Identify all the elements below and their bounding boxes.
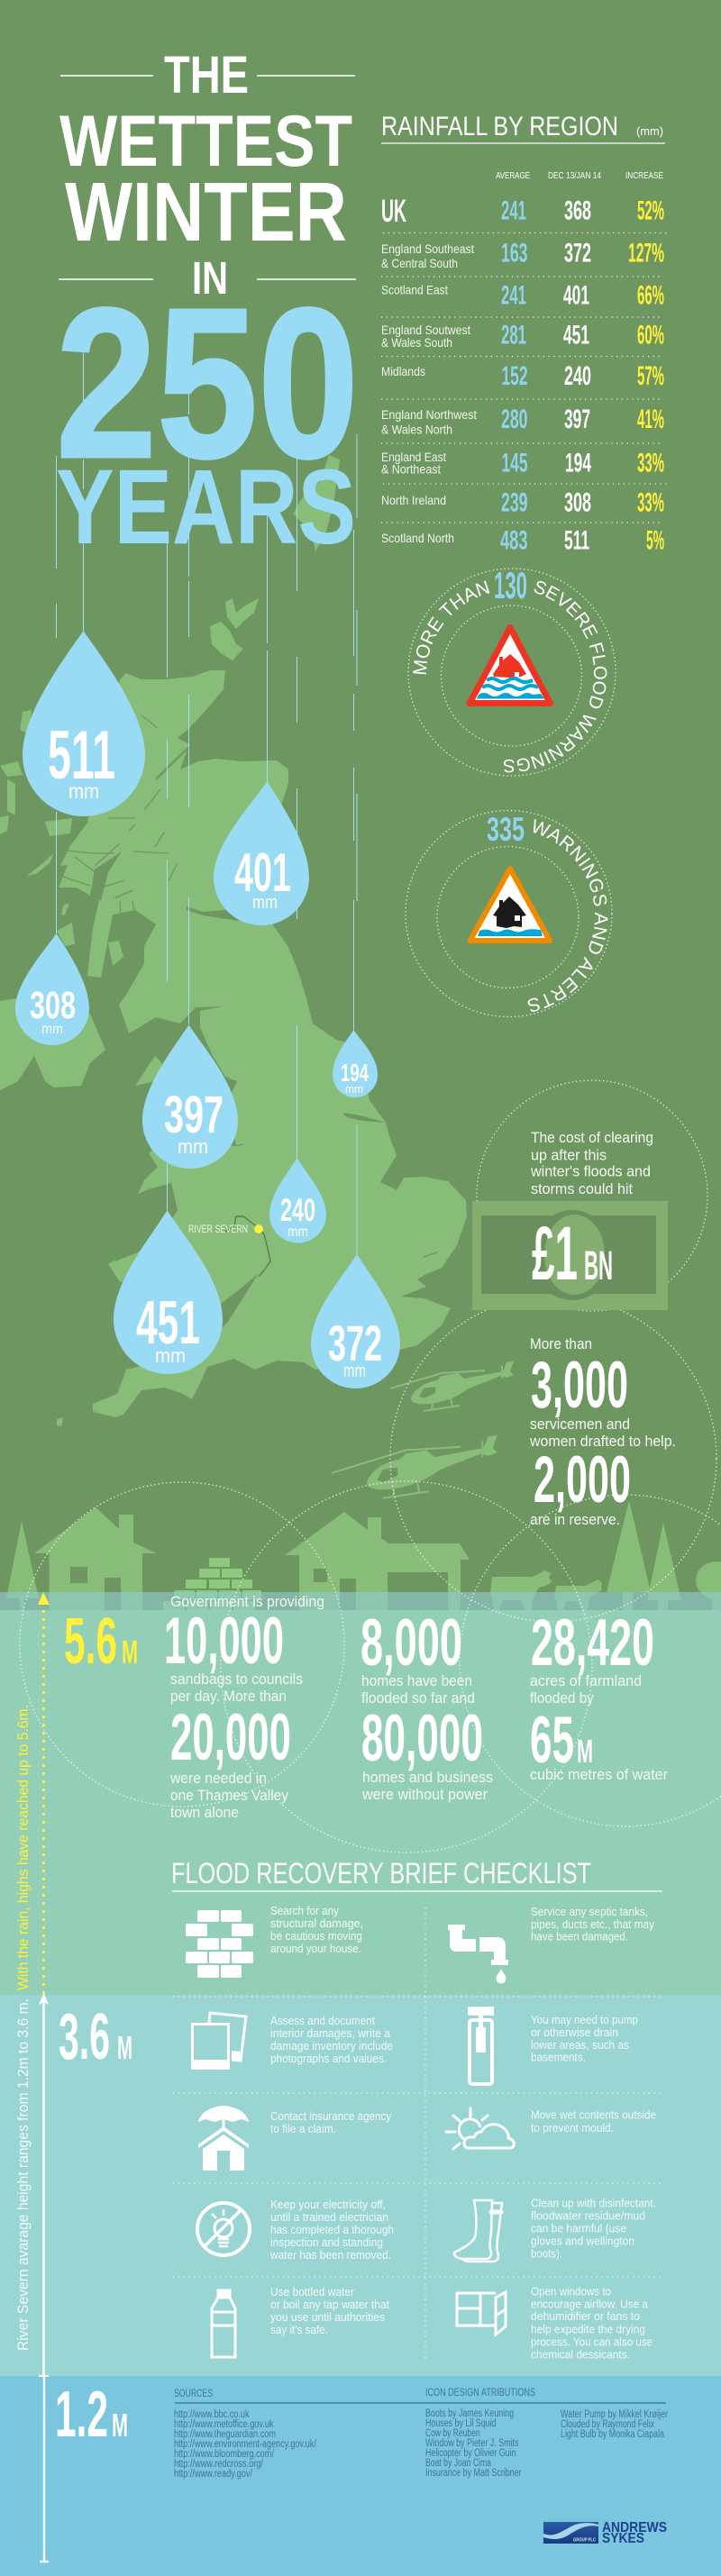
row: England Southwest: & Wales South: [381, 335, 452, 350]
checklist: disinfect: can be harmful (use: [531, 2222, 626, 2235]
drop: 397 mm: [142, 1025, 238, 1169]
icon: banknote: [472, 1201, 668, 1310]
map of the UK: [0, 455, 467, 1426]
icon: wellington boots: [454, 2200, 502, 2262]
checklist: mould: [446, 2108, 656, 2149]
drop: 451 mm: [114, 1210, 223, 1374]
stat: farmland flooded: cubic metres of water: [530, 1766, 668, 1783]
checklist: pump: basements.: [531, 2051, 586, 2063]
row: England Northwest: [381, 405, 664, 436]
title: WINTER: [65, 165, 347, 259]
stat: homes flooded: flooded so far and: [361, 1689, 475, 1707]
title: WETTEST: [59, 101, 352, 182]
row: North Ireland: North Ireland: [381, 493, 446, 507]
row: England Southwest: England Soutwest: [381, 323, 470, 337]
checklist: pump: You may need to pump: [531, 2013, 638, 2026]
drop: 397 mm: 397: [164, 1086, 224, 1144]
row: England Southeast: 372: [564, 238, 591, 269]
stat: sandbags: Government is providing: [170, 1593, 324, 1610]
title: THE: [164, 46, 249, 105]
height marker: 1.2m: 1.2: [55, 2379, 108, 2451]
checklist: pump: or otherwise drain: [531, 2025, 618, 2039]
icon: water pump: [468, 2007, 494, 2084]
height marker: 3.6m: [14, 1993, 132, 2376]
drop: 451 mm: mm: [155, 1344, 186, 1367]
banknote cost panel: £1: [532, 1211, 578, 1296]
row: England Northwest: 397: [564, 405, 590, 434]
checklist heading: FLOOD RECOVERY BRIEF CHECKLIST: [171, 1857, 591, 1889]
tree: small: [647, 1523, 681, 1610]
helicopter: lower: [332, 1435, 497, 1498]
callout: 130 severe flood warnings: MORE THAN: [413, 580, 490, 674]
row: England Northwest: & Wales North: [381, 422, 452, 436]
checklist: electricity: Keep your electricity off,: [270, 2198, 386, 2211]
icon design attributions: Houses by Lil Squid: [425, 2418, 496, 2429]
drop: 372 mm: 372: [328, 1315, 382, 1371]
row: England Southeast: 127%: [628, 238, 664, 269]
stat: servicemen drafted: servicemen and: [530, 1415, 630, 1433]
checklist: bottled water: say it's safe.: [270, 2323, 328, 2336]
checklist: insurance: to file a claim.: [270, 2122, 336, 2135]
sources: http://www.redcross.org/: [174, 2459, 264, 2470]
row: England East: [381, 449, 664, 478]
height marker: 1.2m: M: [112, 2407, 128, 2444]
row: Midlands: [381, 361, 664, 391]
drop: 397 mm: mm: [178, 1135, 208, 1158]
stat: homes flooded: 80,000: [361, 1702, 483, 1775]
stat: servicemen drafted: 2,000: [534, 1443, 631, 1516]
drop: 401 mm: [214, 781, 309, 925]
stat: farmland flooded: [530, 1607, 668, 1783]
icon: sun and cloud: [446, 2108, 514, 2149]
checklist: windows: help expedite the drying: [531, 2322, 645, 2335]
checklist: bottled water: you use until authorities: [270, 2310, 385, 2324]
callout: 130 severe flood warnings: 130: [494, 564, 527, 606]
row: Scotland East: 401: [563, 281, 589, 310]
drop: 308 mm: mm: [41, 1022, 63, 1037]
drop: 401 mm: 401: [234, 842, 291, 903]
stat: sandbags: sandbags to councils: [170, 1670, 303, 1688]
checklist: bottled water: Use bottled water: [270, 2285, 355, 2298]
checklist: interior damage: interior damages, write a: [270, 2026, 391, 2040]
checklist: electricity: until a trained electrician: [270, 2210, 388, 2224]
icon design attributions: Light Bulb by Monika Ciapala: [561, 2429, 664, 2440]
map: islands: [0, 455, 340, 1426]
sources: http://www.bbc.co.uk: [174, 2409, 250, 2420]
icon design attributions: Window by Pieter J. Smits: [425, 2438, 519, 2449]
row: UK: UK: [381, 194, 406, 229]
house: with garage: [285, 1512, 470, 1610]
drop: 372 mm: [311, 1254, 400, 1388]
dotted circles: [20, 1080, 721, 1852]
stat: sandbags: one Thames Valley: [170, 1787, 288, 1804]
stat: servicemen drafted: 3,000: [531, 1349, 628, 1422]
text: cost of clearing up: The cost of clearing: [531, 1129, 653, 1146]
stat: homes flooded: homes and business: [362, 1769, 493, 1786]
callout: 335 warnings and alerts: 335: [487, 811, 525, 848]
stat: servicemen drafted: are in reserve.: [530, 1511, 620, 1528]
drop: 372 mm: mm: [343, 1361, 366, 1381]
rain drops: [15, 631, 400, 1388]
checklist: interior damage: photographs and values.: [270, 2052, 387, 2065]
icon design attributions: [425, 2388, 668, 2479]
icon: flood warning triangle: [470, 869, 550, 941]
stat: sandbags: [164, 1593, 324, 1821]
icon design attributions: Insurance by Matt Scribner: [425, 2468, 522, 2479]
stat: farmland flooded: acres of farmland: [530, 1672, 642, 1689]
icon: house under umbrella: [198, 2106, 249, 2171]
checklist: structural damage: be cautious moving: [270, 1929, 362, 1943]
helicopter: upper: [390, 1361, 514, 1411]
row: England Southwest: 451: [563, 321, 589, 350]
icon: crossed out light bulb: [197, 2203, 250, 2255]
stat: servicemen drafted: More than: [530, 1335, 592, 1352]
checklist: windows: [457, 2285, 653, 2361]
row: England Southeast: & Central South: [381, 256, 458, 270]
row: England Southeast: 163: [501, 238, 528, 269]
rainfall table: 66%: [637, 281, 664, 310]
rainfall table: 33%: [637, 488, 664, 517]
checklist: bottled water: [212, 2285, 389, 2357]
row: England East: 145: [501, 449, 528, 478]
stat: sandbags: 20,000: [170, 1701, 291, 1774]
stat: homes flooded: 8,000: [360, 1607, 462, 1679]
height marker: 5.6m: With the rain, highs have reached up to 5.6m.: [14, 1705, 32, 1990]
checklist: interior damage: Assess and document: [270, 2014, 375, 2027]
checklist: interior damage: damage inventory include: [270, 2039, 393, 2053]
icon: severe flood warning triangle: [470, 627, 550, 703]
checklist: insurance: Contact insurance agency: [270, 2109, 391, 2123]
sandbags pile: [163, 1558, 261, 1610]
checklist: disinfect: gloves and wellington: [531, 2235, 634, 2248]
row: Scotland North: [381, 526, 664, 555]
checklist: windows: encourage airflow. Use a: [531, 2298, 649, 2311]
row: Scotland North: 483: [500, 526, 528, 555]
icon design attributions: Clouded by Raymond Felix: [561, 2419, 654, 2430]
row: England East: England East: [381, 450, 446, 464]
checklist: electricity: has completed a thorough: [270, 2223, 394, 2236]
banknote cost panel: [472, 1129, 668, 1310]
title: IN: [192, 252, 228, 304]
row: Midlands: 240: [564, 361, 591, 391]
stat: farmland flooded: 65: [530, 1704, 574, 1777]
checklist: electricity: water has been removed.: [269, 2248, 391, 2262]
drop: 240 mm: [269, 1158, 326, 1243]
row: Scotland East: 241: [501, 281, 526, 310]
rainfall table: 52%: [637, 196, 664, 225]
logo: Andrews Sykes: ANDREWS: [602, 2520, 667, 2535]
height marker: 5.6m: [14, 1592, 138, 1995]
stat: sandbags: town alone: [170, 1804, 239, 1821]
table heading: RAINFALL BY REGION: [381, 112, 618, 141]
map: River Severn: [225, 1216, 270, 1277]
title: [56, 46, 359, 567]
sources: http://www.environment-agency.gov.uk/: [174, 2439, 317, 2450]
row: England Northwest: England Northwest: [381, 407, 477, 422]
row: England Northwest: 280: [501, 405, 528, 434]
checklist: windows: process. You can also use: [531, 2335, 653, 2348]
text: cost of clearing up: storms could hit: [531, 1180, 633, 1197]
drop: 194 mm: mm: [345, 1082, 363, 1096]
row: England East: & Northeast: [381, 461, 441, 476]
text: cost of clearing up: [530, 1129, 653, 1197]
checklist: disinfect: [454, 2197, 656, 2262]
stat: farmland flooded: M: [577, 1733, 593, 1770]
checklist: windows: chemical dessicants.: [531, 2348, 630, 2361]
arrow: white height range: [39, 1993, 49, 2376]
text: cost of clearing up: up after this: [531, 1146, 607, 1164]
height marker: 5.6m: M: [122, 1634, 138, 1670]
height marker: 3.6m: 3.6: [59, 2001, 110, 2073]
callout: 335 warnings and alerts: WARNINGS AND ALERTS: [528, 819, 607, 1012]
checklist: mould: to prevent mould.: [531, 2121, 614, 2135]
checklist: disinfect: boots).: [531, 2246, 562, 2260]
stat: sandbags: per day. More than: [170, 1688, 287, 1705]
checklist: structural damage: [186, 1904, 363, 1978]
icon design attributions: Water Pump by Mikkel Krøijer: [561, 2409, 668, 2420]
row: Midlands: Midlands: [381, 364, 425, 378]
stat: homes flooded: homes have been: [361, 1672, 472, 1689]
rainfall table: 33%: [637, 449, 664, 478]
height marker: 1.2m: [40, 2376, 128, 2562]
table heading: (mm): [636, 124, 663, 138]
tree: tall: [607, 1500, 651, 1610]
row: England Southeast: [381, 238, 664, 270]
column headers: DEC 13/JAN 14: [548, 170, 601, 181]
row: UK: [381, 194, 664, 229]
row: Scotland North: 511: [564, 526, 589, 555]
checklist: windows: dehumidifier or fans to: [531, 2309, 640, 2323]
column headers: AVERAGE: [496, 170, 530, 181]
callout: 130 severe flood warnings: SEVERE FLOOD WARNINGS: [503, 580, 607, 773]
stat: servicemen drafted: women drafted to help.: [529, 1433, 676, 1450]
rainfall table: 60%: [637, 321, 664, 350]
drop: 401 mm: mm: [252, 893, 278, 913]
icon: pipes and drip: [448, 1925, 508, 1984]
drop: 240 mm: mm: [287, 1224, 308, 1240]
icon: open window: [457, 2292, 506, 2335]
icon design attributions: Boots by James Keuning: [425, 2408, 514, 2419]
sources: SOURCES: [174, 2389, 213, 2399]
row: North Ireland: 308: [564, 488, 591, 517]
icon: bricks: [186, 1910, 253, 1978]
row: England East: 194: [565, 449, 591, 478]
stat: servicemen drafted: [529, 1335, 676, 1528]
rainfall table: 41%: [637, 405, 664, 434]
logo: Andrews Sykes: [543, 2520, 667, 2546]
scene: houses, trees, cows and sandbags: [6, 1361, 721, 1610]
label: River Severn: RIVER SEVERN: [188, 1224, 248, 1235]
drop: 451 mm: 451: [136, 1288, 200, 1357]
row: UK: 368: [564, 196, 591, 225]
checklist: disinfect: Clean up with disinfectant.: [531, 2197, 656, 2210]
tree: left: [6, 1521, 39, 1610]
row: North Ireland: 239: [501, 488, 528, 517]
height marker: 3.6m: River Severn avarage height ranges from 1.2m to 3.6 m.: [14, 1998, 32, 2351]
arrow: yellow dotted: [38, 1592, 50, 1995]
map: sea lochs and firths: [90, 851, 386, 1123]
checklist: septic tanks: have been damaged.: [531, 1930, 628, 1943]
tree: round: [696, 1561, 721, 1610]
checklist: structural damage: around your house.: [270, 1942, 361, 1955]
callout: 130 severe flood warnings: [407, 564, 616, 777]
rainfall table: 57%: [637, 361, 664, 391]
drop: 308 mm: 308: [30, 984, 76, 1027]
checklist: septic tanks: pipes, ducts etc., that may: [531, 1917, 654, 1931]
stat: sandbags: 10,000: [164, 1605, 284, 1678]
drop: 511 mm: [23, 631, 145, 816]
drip lines: [56, 352, 357, 1254]
stat: sandbags: were needed in: [169, 1770, 267, 1787]
checklist: disinfect: floodwater residue/mud: [531, 2209, 645, 2223]
sources: http://www.bloomberg.com/: [174, 2449, 275, 2460]
cow: large: [490, 1570, 552, 1610]
logo: Andrews Sykes: SYKES: [602, 2531, 644, 2546]
icon design attributions: Boat by Joan Cima: [425, 2458, 491, 2469]
drop: 194 mm: 194: [341, 1059, 369, 1087]
stat: homes flooded: [360, 1607, 493, 1803]
row: Midlands: 152: [501, 361, 528, 391]
rainfall table: [381, 112, 669, 555]
row: Scotland North: Scotland North: [381, 531, 454, 545]
row: Scotland East: Scotland East: [381, 283, 448, 297]
checklist: pump: [468, 2007, 638, 2084]
icon design attributions: ICON DESIGN ATRIBUTIONS: [425, 2388, 535, 2399]
checklist: septic tanks: [448, 1905, 654, 1984]
title: YEARS: [56, 448, 356, 567]
row: England Southeast: England Southeast: [381, 241, 474, 256]
icon: photographs: [191, 2013, 246, 2070]
sources: http://www.metoffice.gov.uk: [174, 2419, 274, 2430]
banknote cost panel: BN: [584, 1242, 613, 1288]
stat: homes flooded: were without power: [361, 1786, 488, 1803]
checklist: insurance: [198, 2106, 391, 2171]
map: Northern Ireland: [0, 998, 105, 1090]
row: North Ireland: [381, 488, 664, 517]
checklist: structural damage: Search for any: [270, 1904, 339, 1917]
row: UK: 241: [501, 196, 526, 225]
height marker: 3.6m: M: [117, 2029, 132, 2066]
row: England Southwest: 281: [501, 321, 526, 350]
drop: 511 mm: mm: [68, 779, 99, 803]
checklist: septic tanks: Service any septic tanks,: [531, 1905, 648, 1918]
drop: 240 mm: 240: [280, 1193, 315, 1228]
stat: farmland flooded: flooded by: [530, 1689, 594, 1707]
drop: 194 mm: [333, 1030, 378, 1097]
icon design attributions: Cow by Reuben: [425, 2428, 480, 2439]
height marker: 5.6m: 5.6: [64, 1606, 117, 1678]
text: cost of clearing up: winter's floods and: [530, 1162, 651, 1180]
drop: 308 mm: [15, 933, 89, 1045]
row: England Southwest: [381, 321, 664, 350]
icon design attributions: Helicopter by Olivier Guin: [425, 2448, 516, 2459]
checklist: structural damage: structural damage,: [270, 1916, 363, 1930]
checklist: pump: lower areas, such as: [531, 2038, 629, 2052]
rainfall table: 5%: [646, 526, 664, 555]
checklist: electricity: [197, 2198, 394, 2262]
checklist: interior damage: [191, 2013, 393, 2070]
sources: [174, 2389, 666, 2480]
row: Scotland East: [381, 281, 664, 310]
cow: small: [554, 1579, 602, 1610]
checklist: electricity: inspection and standing: [270, 2235, 383, 2249]
drop: 511 mm: 511: [48, 717, 115, 794]
water level bands: [0, 1592, 721, 2576]
house: left: [34, 1507, 157, 1610]
checklist: bottled water: or boil any tap water that: [270, 2298, 389, 2311]
icon: water bottle: [212, 2290, 235, 2357]
checklist: mould: Move wet contents outside: [531, 2108, 656, 2121]
logo: Andrews Sykes: GROUP PLC: [573, 2537, 596, 2543]
checklist: windows: Open windows to: [531, 2285, 611, 2298]
sources: http://www.theguardian.com: [174, 2429, 276, 2440]
column headers: INCREASE: [625, 170, 663, 181]
callout: 335 warnings and alerts: [405, 809, 613, 1018]
sources: http://www.ready.gov/: [174, 2469, 253, 2480]
column headers: [496, 170, 663, 181]
title: 250: [56, 264, 359, 503]
